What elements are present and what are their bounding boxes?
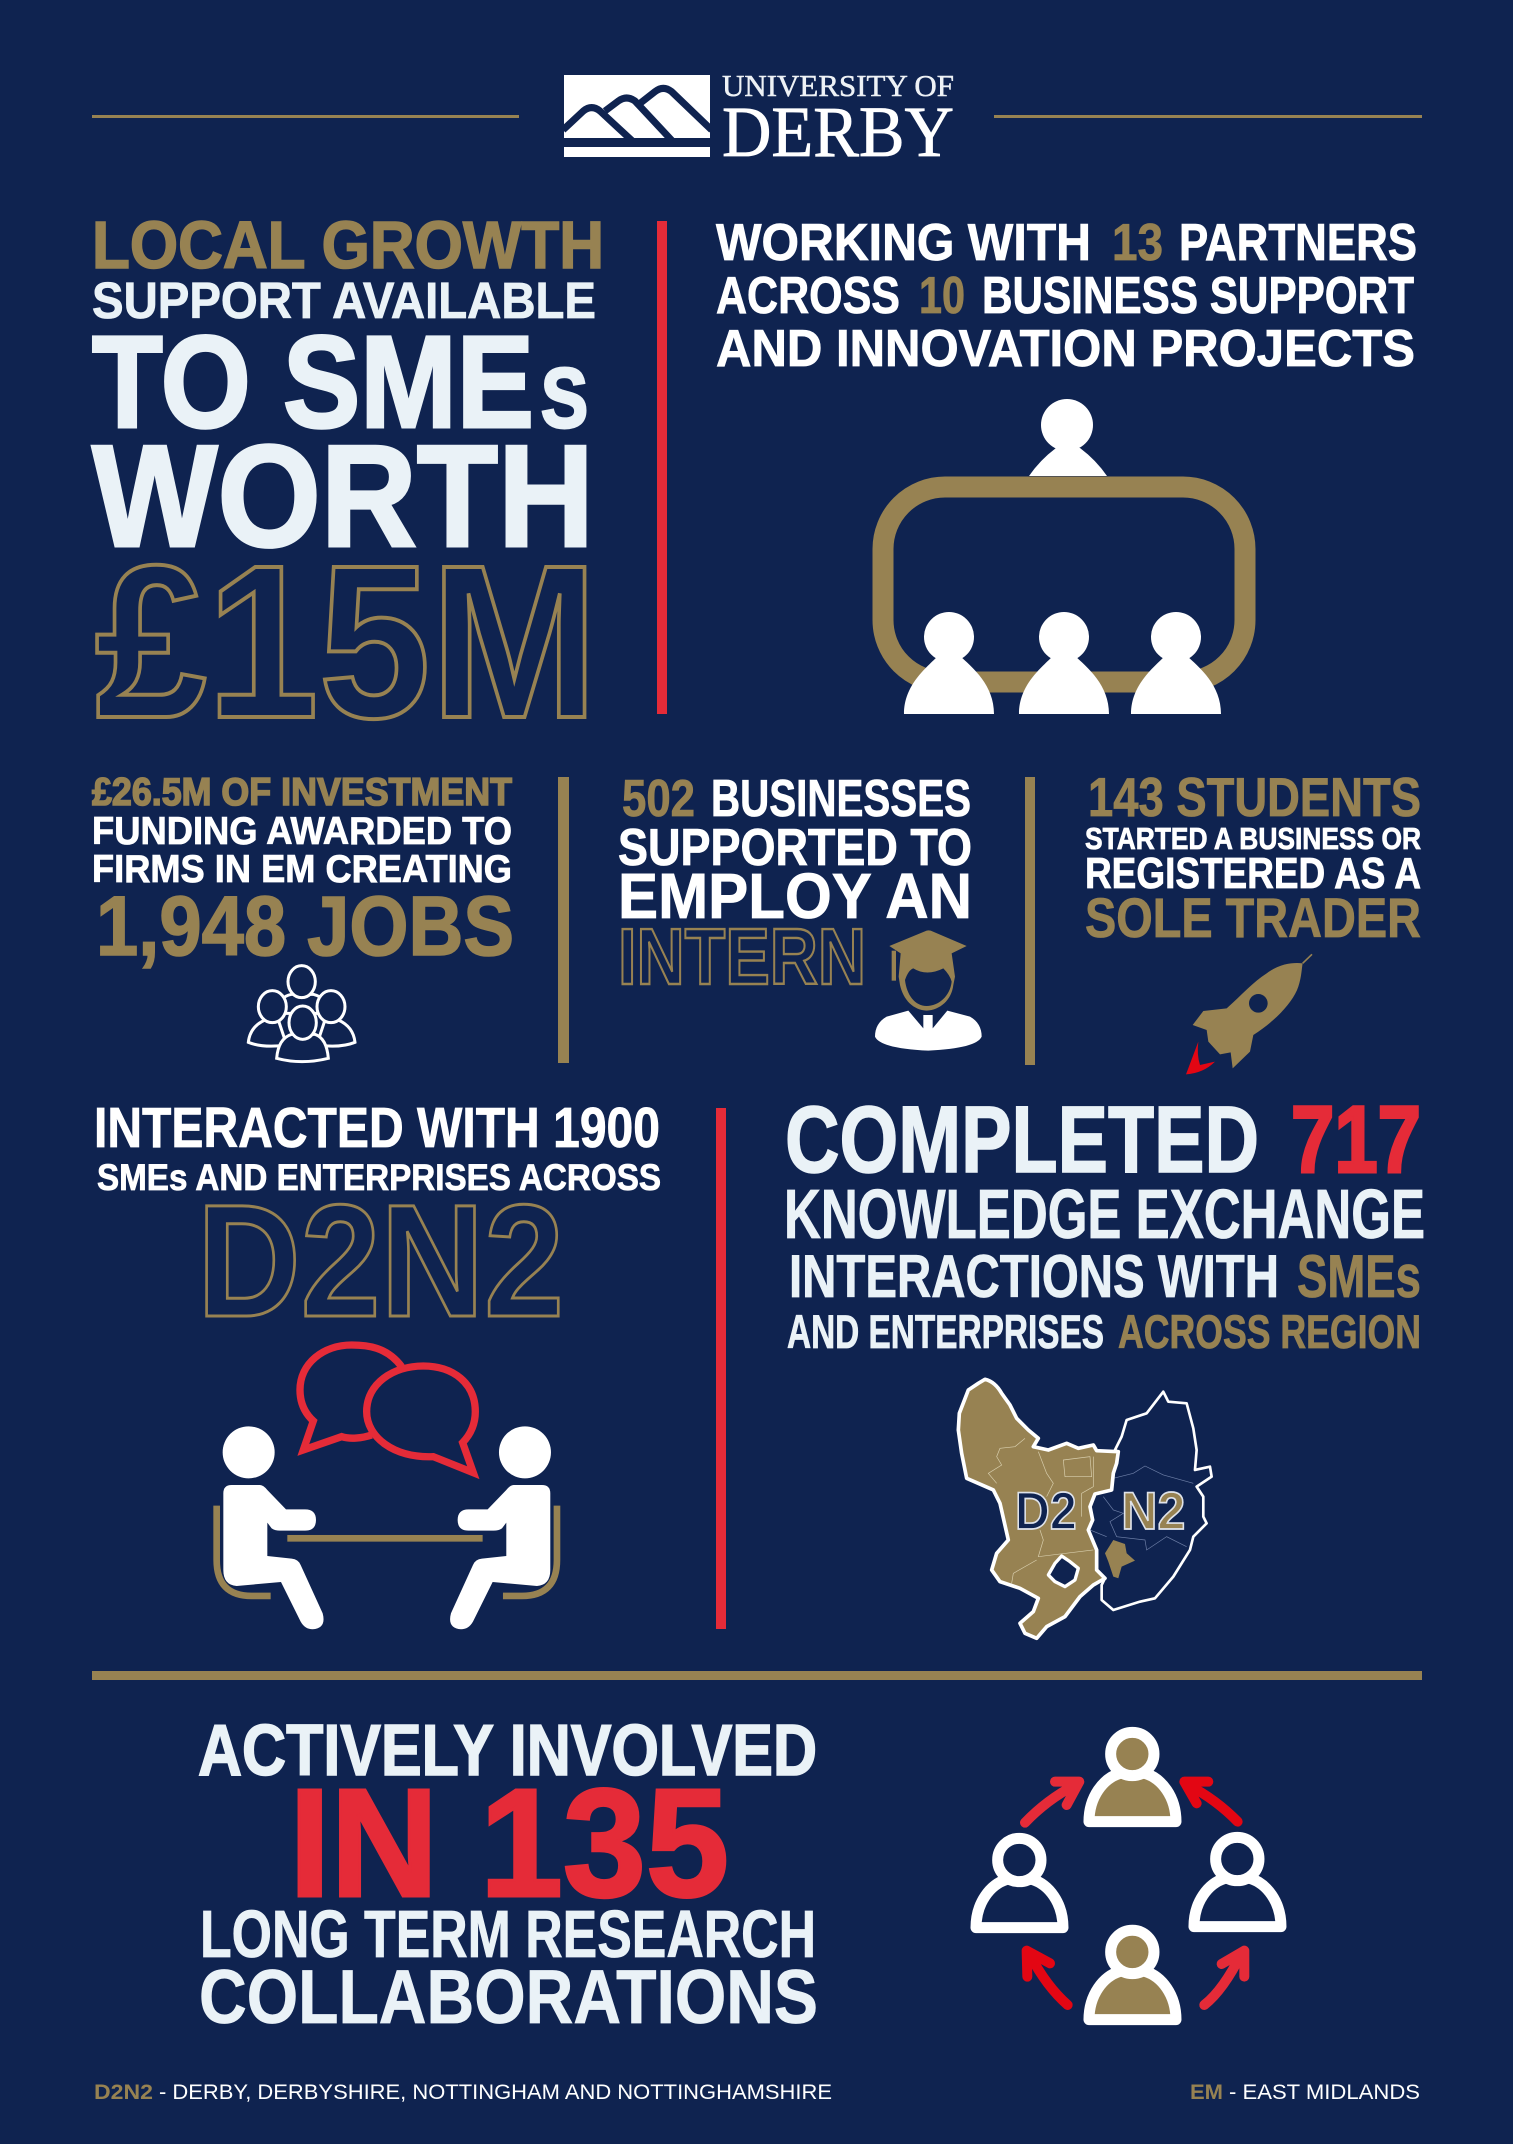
panel: investment funding: FUNDING AWARDED TO — [92, 810, 512, 853]
panel: partners text: BUSINESS SUPPORT — [982, 267, 1414, 325]
logo text: UNIVERSITY OF — [722, 68, 954, 103]
map region: N2 — [1088, 1392, 1212, 1610]
panel: investment funding: FIRMS IN EM CREATING — [92, 848, 512, 891]
icon: speech bubbles — [300, 1345, 475, 1473]
panel: local growth headline: TO SME — [92, 308, 534, 455]
panel: interacted with D2N2: SMEs AND ENTERPRISES ACROSS — [97, 1157, 661, 1198]
icon: mountains — [563, 75, 712, 157]
panel: partners text: 10 — [919, 267, 965, 325]
panel: partners text: AND INNOVATION PROJECTS — [716, 320, 1415, 378]
panel: partners text — [716, 214, 1417, 378]
panel: research collaborations: LONG TERM RESEARCH — [200, 1897, 816, 1972]
panel: knowledge exchange: 717 — [1291, 1087, 1421, 1193]
panel: local growth headline — [92, 208, 604, 764]
icon: group of people — [248, 966, 355, 1062]
panel: interns: EMPLOY AN — [618, 860, 972, 932]
panel: knowledge exchange: ACROSS REGION — [1118, 1305, 1421, 1358]
person: bottom — [1089, 1930, 1176, 2020]
panel: local growth headline: LOCAL GROWTH — [92, 208, 604, 283]
icon: meeting table with people — [883, 399, 1245, 714]
person: top — [1089, 1732, 1176, 1822]
panel: interns — [618, 770, 972, 1001]
icon: two people talking at a table — [217, 1345, 557, 1629]
map region: Nottingham — [1105, 1540, 1135, 1578]
panel: interns: SUPPORTED TO — [618, 819, 972, 877]
panel: research collaborations: COLLABORATIONS — [199, 1955, 818, 2040]
map label: D2: D2 — [1015, 1482, 1077, 1541]
footnote: D2N2 definition: - DERBY, DERBYSHIRE, NOTTINGHAM AND NOTTINGHAMSHIRE — [159, 2081, 832, 2104]
footnote: EM definition: - EAST MIDLANDS — [1229, 2081, 1420, 2104]
panel: knowledge exchange — [784, 1087, 1425, 1358]
footnote: D2N2 definition: D2N2 — [94, 2081, 153, 2104]
panel: local growth headline: SUPPORT AVAILABLE — [92, 272, 596, 329]
person: left — [976, 1838, 1063, 1928]
arrows — [1025, 1782, 1244, 2005]
panel: interns: INTERN — [618, 912, 866, 1001]
person: right — [1194, 1837, 1281, 1927]
panel: research collaborations: IN 135 — [289, 1757, 729, 1929]
panel: partners text: WORKING WITH — [716, 214, 1091, 272]
panel: research collaborations: ACTIVELY INVOLVED — [198, 1711, 817, 1791]
icon: collaboration circle — [976, 1732, 1281, 2020]
panel: knowledge exchange: SMEs — [1297, 1243, 1421, 1310]
panel: interacted with D2N2: D2N2 — [197, 1171, 564, 1350]
icon: graduate — [875, 930, 982, 1051]
panel: interacted with D2N2: INTERACTED WITH 1900 — [94, 1096, 660, 1160]
panel: knowledge exchange: AND ENTERPRISES — [787, 1305, 1104, 1358]
panel: knowledge exchange: COMPLETED — [785, 1087, 1259, 1193]
panel: investment funding: £26.5M OF INVESTMENT — [92, 771, 512, 814]
panel: students — [1085, 766, 1421, 949]
panel: partners text: ACROSS — [716, 267, 900, 325]
panel: students: 143 STUDENTS — [1088, 766, 1421, 828]
panel: partners text: 13 — [1112, 214, 1163, 272]
panel: research collaborations — [198, 1711, 818, 2040]
icon: rocket — [1186, 954, 1312, 1074]
panel: interns: 502 — [622, 770, 695, 828]
map region: D2 — [958, 1379, 1118, 1638]
panel: local growth headline: S — [541, 351, 588, 445]
panel: students: SOLE TRADER — [1085, 886, 1421, 949]
map label: N2: N2 — [1121, 1482, 1185, 1541]
panel: interacted with D2N2 — [94, 1096, 661, 1350]
footnote: EM definition: EM — [1190, 2081, 1223, 2104]
panel: students: REGISTERED AS A — [1085, 849, 1421, 898]
panel: partners text: PARTNERS — [1179, 214, 1417, 272]
map: D2 and N2 regions — [958, 1379, 1212, 1638]
logo: University of Derby — [563, 68, 954, 172]
panel: local growth headline: WORTH — [92, 415, 594, 577]
panel: students: STARTED A BUSINESS OR — [1085, 821, 1421, 856]
panel: investment funding — [92, 771, 514, 973]
panel: investment funding: 1,948 JOBS — [96, 879, 514, 973]
panel: knowledge exchange: INTERACTIONS WITH — [789, 1243, 1279, 1310]
panel: local growth headline: £15M — [95, 521, 598, 764]
panel: interns: BUSINESSES — [711, 770, 971, 828]
logo text: DERBY — [722, 92, 954, 172]
